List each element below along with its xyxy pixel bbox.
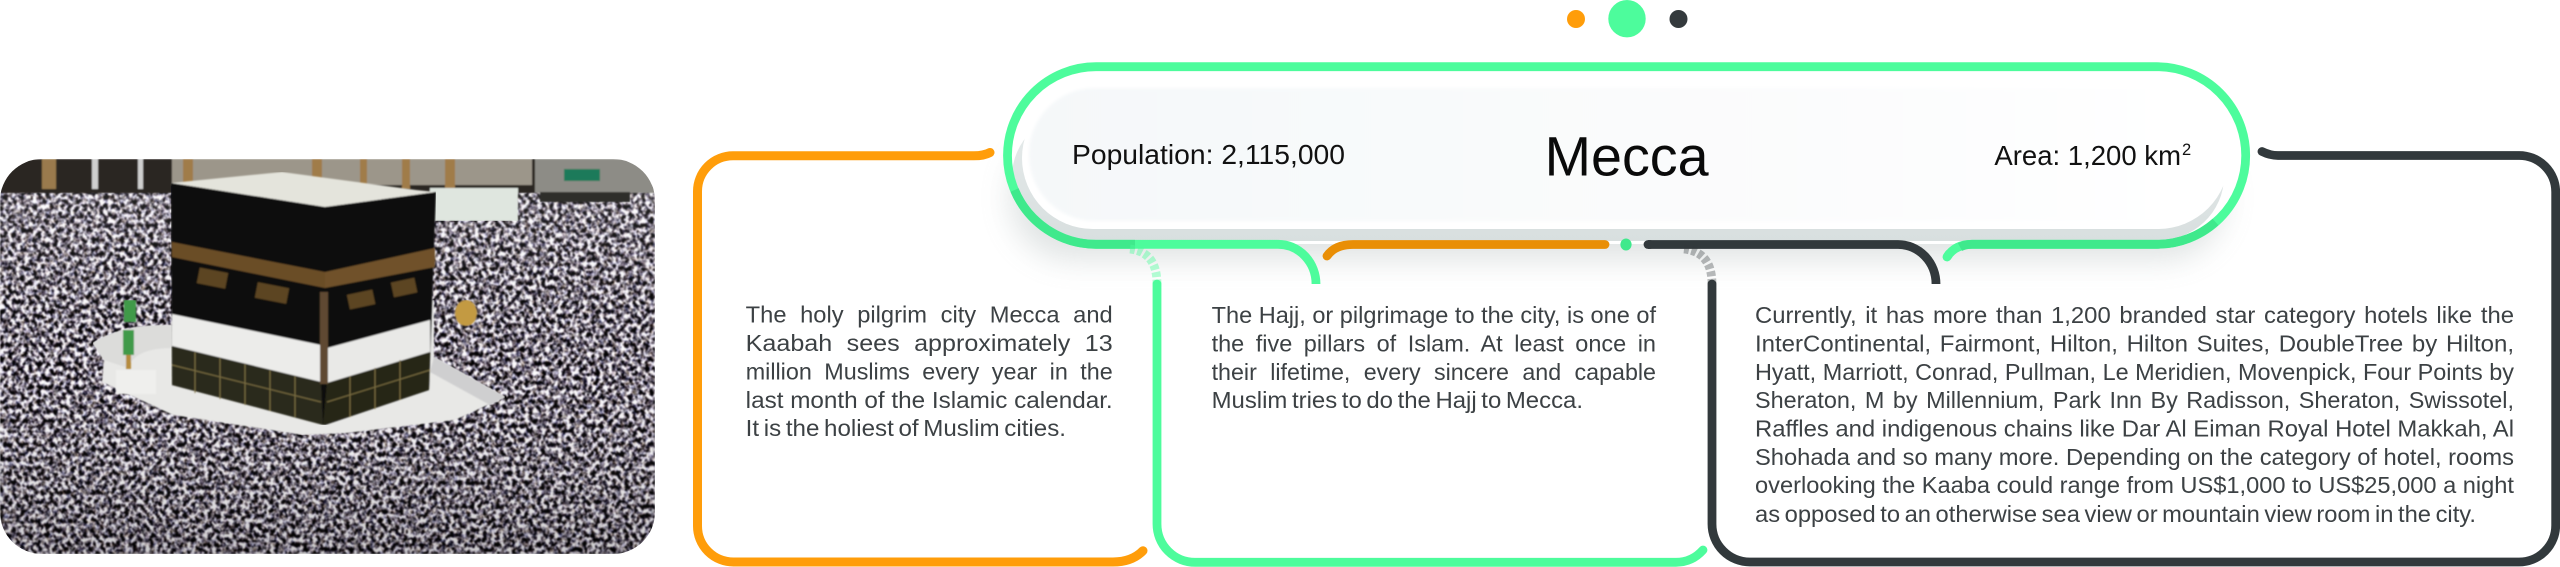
text block: dark panel: InterContinental, Fairmont, Hilton, Hilton Suites, DoubleTree by Hilton, [1755,330,2514,356]
text block: dark panel: Sheraton, M by Millennium, Park Inn By Radisson, Sheraton, Swissotel, [1755,387,2514,413]
text block: green panel [1212,302,1656,413]
area text: Area: 1,200 km [1994,140,2181,171]
pill inner fill [1029,88,2219,221]
population text: Population: 2,115,000 [1072,139,1345,170]
panel: green outline and pill border [1008,67,2246,562]
text block: dark panel: Currently, it has more than 1,200 branded star category hotels like the [1755,302,2514,328]
area text: 2 [2182,141,2191,159]
panel: dark outline [1648,152,2556,562]
dark connector start cap [1648,240,1650,249]
text block: dark panel: overlooking the Kaaba could range from US$1,000 to US$25,000 a night [1755,472,2514,498]
pill white base [1008,67,2245,244]
text block: orange panel: It is the holiest of Muslim cities. [746,415,1066,441]
pill face [1022,87,2229,229]
text block: orange panel: Kaabah sees approximately 13 [746,330,1113,356]
connector dot [1620,238,1632,250]
text block: green panel: their lifetime, every sincere and capable [1212,359,1656,385]
text block: dark panel [1755,302,2514,527]
shaded border portions [1960,222,2216,247]
dark connector [1648,244,1936,284]
Hijr Ismail wall and lanterns [93,300,505,405]
text block: green panel: the five pillars of Islam. At least once in [1212,330,1656,356]
marble floor around the Kaaba [93,300,505,435]
background architecture [0,159,655,221]
pill shadow [1010,135,2225,260]
panel: title pill [1008,67,2245,244]
title: Mecca: Mecca [1545,125,1709,188]
pill border stroke [1008,67,2246,284]
panel: orange outline [698,152,1143,562]
indicator: three dots [1567,0,1688,37]
dark panel frame [1712,152,2556,562]
text block: dark panel: Shohada and so many more. Depending on the category of hotel, rooms [1755,444,2514,470]
text block: dark panel: as opposed to an otherwise sea view or mountain view room in the city. [1755,501,2476,527]
text block: orange panel [746,302,1113,441]
text block: green panel: The Hajj, or pilgrimage to the city, is one of [1212,302,1656,328]
crowd of pilgrims [0,185,655,554]
photo: Kaaba surrounded by pilgrims [0,159,655,554]
orange connector segment [1327,244,1605,256]
green panel frame [1157,284,1703,562]
striped fold [1684,249,1712,284]
text block: orange panel: million Muslims every year in the [746,358,1113,384]
text block: dark panel: Hyatt, Marriott, Conrad, Pullman, Le Meridien, Movenpick, Four Points by [1755,359,2514,385]
Kaaba building [171,172,436,425]
crowd light shading [0,185,655,554]
text block: green panel: Muslim tries to do the Hajj to Mecca. [1212,387,1583,413]
text block: orange panel: last month of the Islamic calendar. [746,387,1113,413]
text block: dark panel: Raffles and indigenous chains like Dar Al Eiman Royal Hotel Makkah, Al [1755,416,2514,442]
striped fold [1130,249,1157,284]
pill lower shade [1012,112,2224,241]
text block: orange panel: The holy pilgrim city Mecca and [746,302,1113,328]
